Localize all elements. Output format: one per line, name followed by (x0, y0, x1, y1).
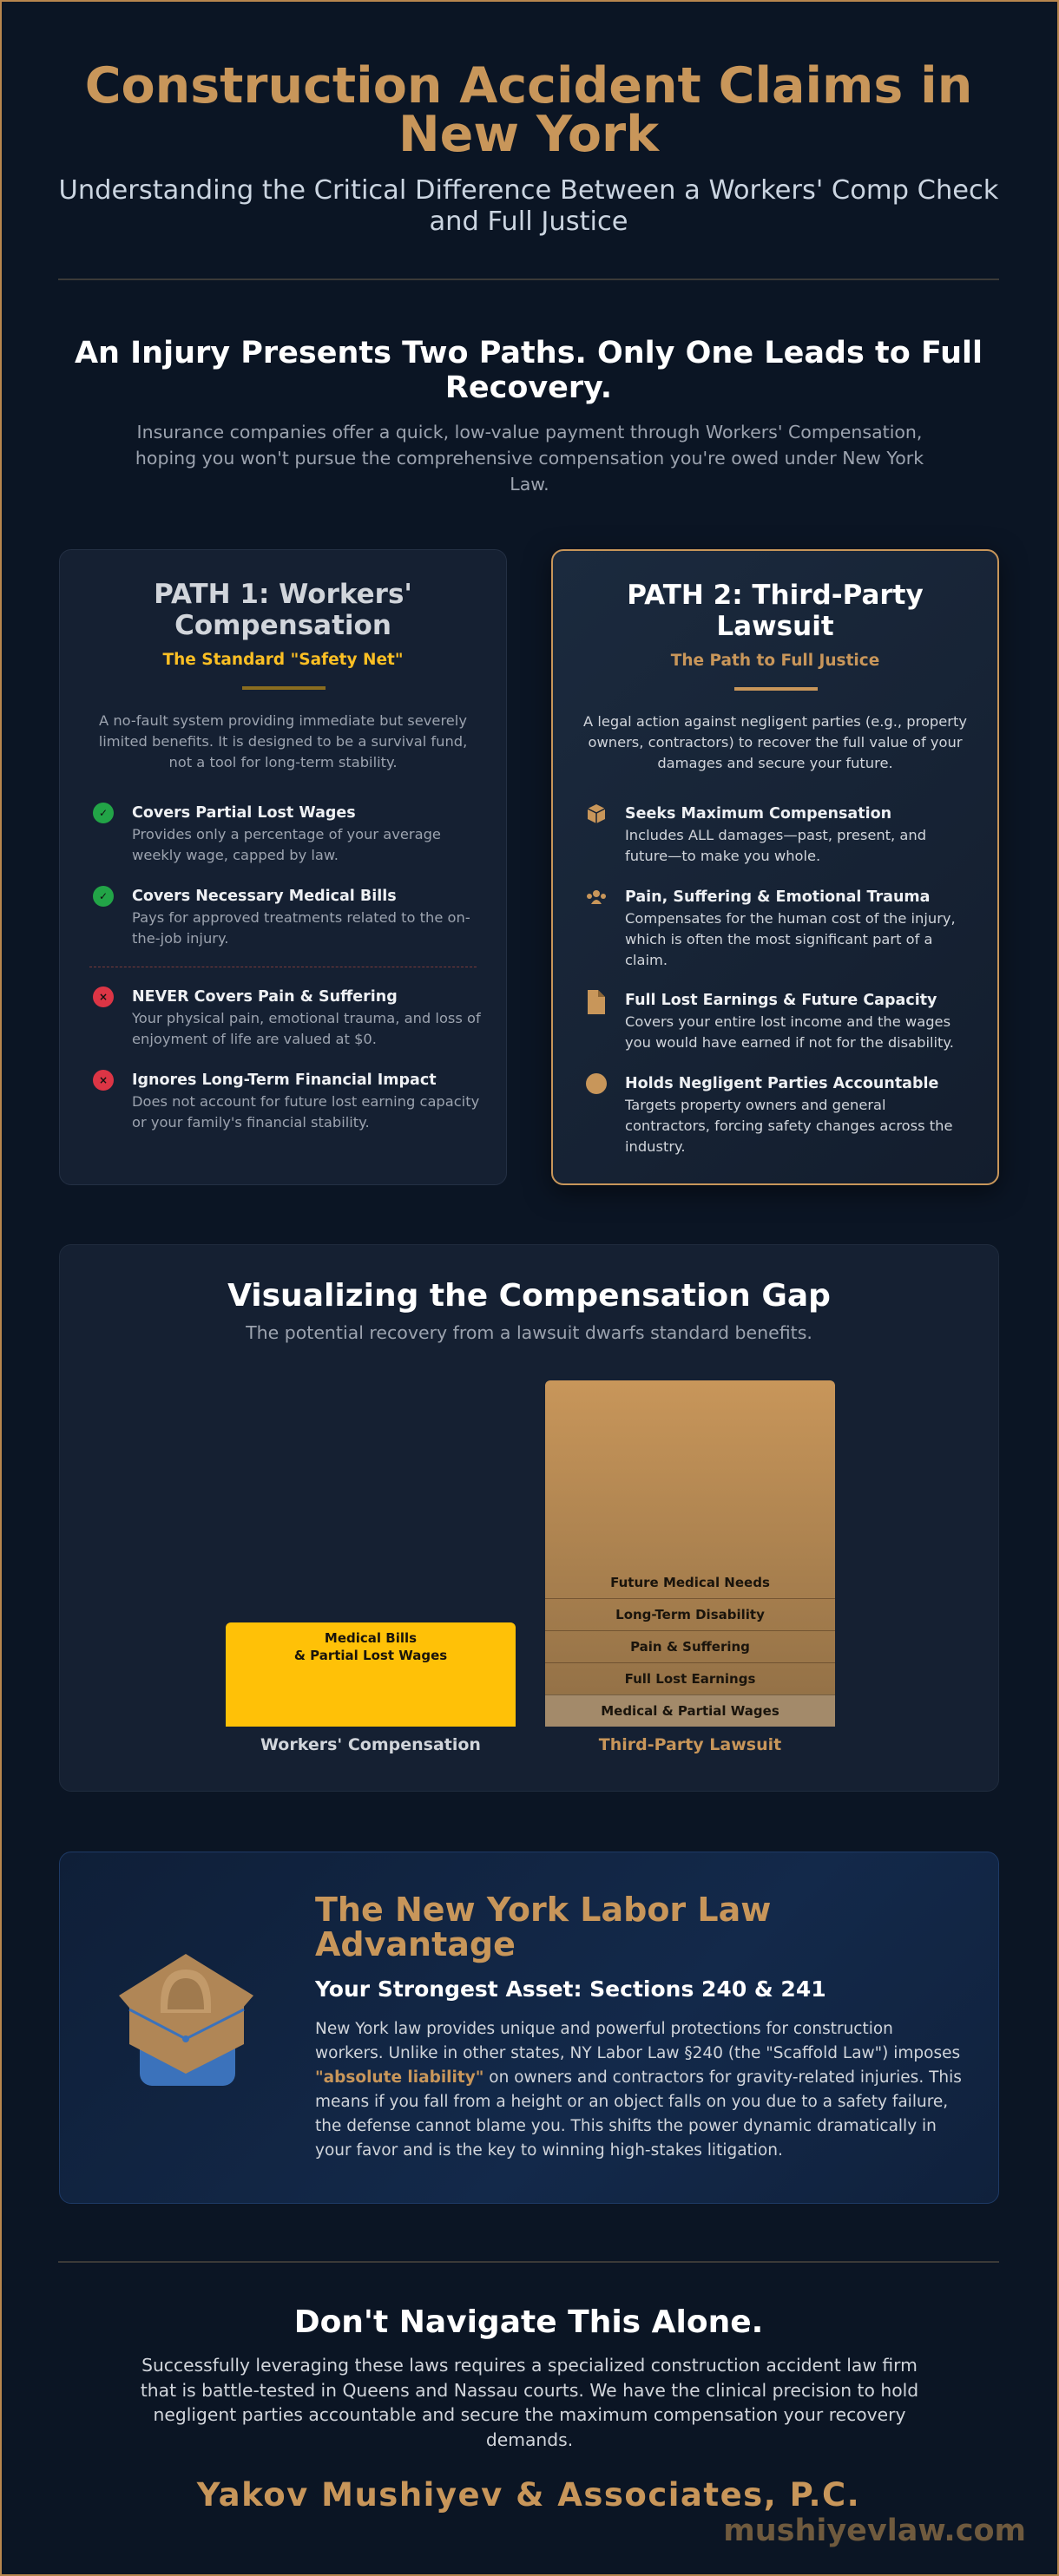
firm name: Yakov Mushiyev & Associates, P.C. (197, 2476, 860, 2514)
bar: third-party lawsuit: Medical & Partial Wages (601, 1703, 779, 1719)
labor law heading: The New York Labor Law (315, 1891, 771, 1929)
icon: document (588, 990, 605, 1014)
item: long-term: Ignores Long-Term Financial Impact (132, 1072, 437, 1089)
item: medical bills: Covers Necessary Medical Bills (132, 888, 397, 905)
item: partial lost wages (93, 803, 441, 863)
website: mushiyevlaw.com (723, 2514, 1026, 2548)
item: pain suffering (587, 888, 956, 968)
icon: x (93, 986, 114, 1007)
bar: third-party lawsuit: Future Medical Needs (610, 1575, 770, 1590)
item: never pain: Your physical pain, emotional trauma, and loss of enjoyment of life are valued at $0. (132, 1010, 481, 1047)
bar: third-party lawsuit: Full Lost Earnings (625, 1671, 755, 1687)
item: partial lost wages: Covers Partial Lost Wages (132, 804, 356, 822)
item: accountable (586, 1073, 953, 1155)
bar: third-party lawsuit: Long-Term Disability (615, 1607, 765, 1622)
icon: people (587, 890, 606, 904)
bar: workers' comp: Medical Bills (325, 1630, 417, 1646)
item: lost earnings (588, 990, 954, 1051)
chart subheading: The potential recovery from a lawsuit dwarfs standard benefits. (246, 1322, 812, 1343)
icon: check (93, 886, 114, 907)
panel description: A legal action against negligent parties (e.g., property owners, contractors) to recover the full value of your damages and secure your future. (583, 713, 967, 771)
icon: circle (586, 1073, 607, 1094)
item: medical bills (93, 886, 470, 947)
item: long-term (93, 1070, 479, 1131)
panel description: A no-fault system providing immediate but severely limited benefits. It is designed to be a survival fund, not a tool for long-term stability. (99, 712, 467, 770)
icon: x: × (99, 1074, 108, 1086)
title: Construction Accident Claims in New York (85, 57, 972, 163)
labor law subheading: Your Strongest Asset: Sections 240 & 241 (315, 1976, 826, 2002)
panel heading: PATH 2: Third-Party Lawsuit (627, 580, 924, 642)
item: lost earnings: Full Lost Earnings & Future Capacity (625, 992, 937, 1009)
bar: workers' comp: & Partial Lost Wages (294, 1648, 447, 1663)
bar: workers' comp (226, 1622, 516, 1727)
icon: box (588, 804, 605, 823)
panel: workers' compensation (59, 549, 507, 1185)
closing text: Successfully leveraging these laws requires a specialized construction accident law firm that is battle-tested in Queens and Nassau courts. We have the clinical precision to hold negligent parties accountable and secure the maximum compensation your recovery demands. (141, 2355, 918, 2450)
item: lost earnings: Covers your entire lost income and the wages you would have earned if not for the disability. (625, 1013, 954, 1051)
panel: labor law advantage (59, 1852, 999, 2204)
closing heading: Don't Navigate This Alone. (294, 2304, 763, 2340)
intro text: Insurance companies offer a quick, low-value payment through Workers' Compensation, hoping you won't pursue the comprehensive compensation you're owed under New York Law. (135, 422, 924, 495)
item: accountable: Targets property owners and general contractors, forcing safety changes across the industry. (625, 1097, 953, 1155)
bar: third-party lawsuit: Pain & Suffering (630, 1639, 750, 1655)
labor law heading (315, 1891, 771, 1963)
chart heading: Visualizing the Compensation Gap (227, 1278, 831, 1314)
item: pain suffering: Compensates for the human cost of the injury, which is often the most significant part of a claim. (625, 910, 956, 968)
item: maximum compensation (588, 804, 926, 864)
icon: check: ✓ (99, 807, 108, 819)
item: never pain (93, 986, 481, 1047)
panel subheading: The Standard "Safety Net" (162, 651, 404, 669)
item: never pain: NEVER Covers Pain & Suffering (132, 988, 398, 1006)
labor law text: New York law provides unique and powerful protections for construction workers. Unlike in other states, NY Labor Law §240 (the "Scaffold Law") imposes "absolute liability" on owners and contractors for gravity-related injuries. This means if you fall from a height or an object falls on you due to a safety failure, the defense cannot blame you. This shifts the power dynamic dramatically in your favor and is the key to winning high-stakes litigation. (315, 2020, 962, 2160)
bar: third-party lawsuit (545, 1380, 835, 1727)
item: maximum compensation: Seeks Maximum Compensation (625, 805, 891, 823)
icon: x: × (99, 991, 108, 1003)
item: long-term: Does not account for future lost earning capacity or your family's financial stability. (132, 1093, 479, 1131)
panel subheading: The Path to Full Justice (671, 652, 879, 670)
bar chart (226, 1380, 835, 1754)
item: maximum compensation: Includes ALL damages—past, present, and future—to make you whole. (625, 827, 926, 864)
heading: two paths: An Injury Presents Two Paths. Only One Leads to Full Recovery. (75, 336, 983, 405)
item: partial lost wages: Provides only a percentage of your average weekly wage, capped by law. (132, 826, 441, 863)
panel heading: PATH 1: Workers' Compensation (154, 579, 412, 641)
item: accountable: Holds Negligent Parties Accountable (625, 1075, 938, 1092)
item: pain suffering: Pain, Suffering & Emotional Trauma (625, 888, 930, 906)
icon: check (93, 803, 114, 823)
panel: third-party lawsuit (551, 549, 999, 1185)
subtitle: Understanding the Critical Difference Between a Workers' Comp Check and Full Justice (59, 175, 998, 237)
icon: x (93, 1070, 114, 1091)
panel: compensation gap chart (59, 1244, 999, 1792)
label: lawsuit: Third-Party Lawsuit (599, 1735, 781, 1754)
label: workers' comp: Workers' Compensation (260, 1735, 481, 1754)
icon: check: ✓ (99, 890, 108, 902)
icon: hard hat / shield (119, 1954, 253, 2086)
item: medical bills: Pays for approved treatments related to the on-the-job injury. (132, 909, 470, 947)
labor law heading: Advantage (315, 1925, 516, 1963)
